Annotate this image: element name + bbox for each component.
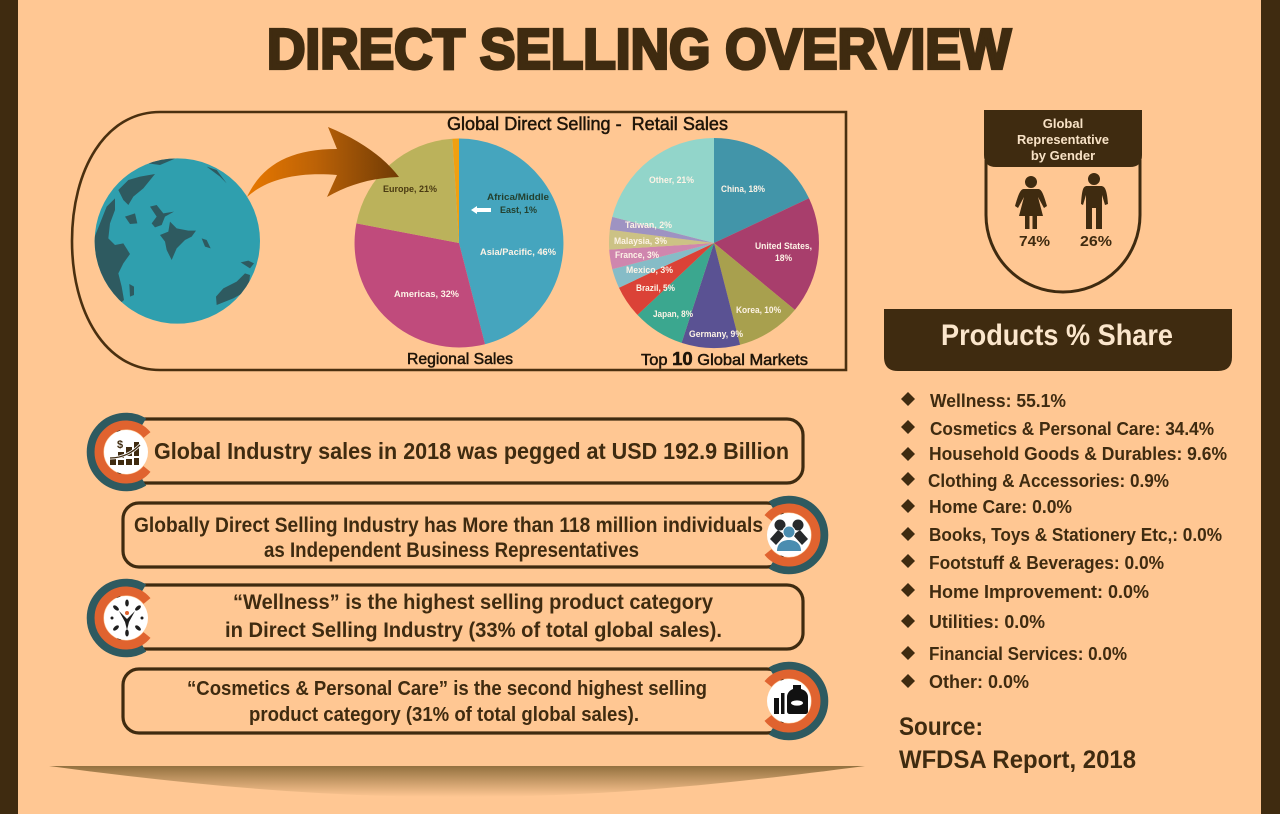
pie chart: top 10 global markets: Malaysia, 3% (614, 236, 667, 247)
source note: WFDSA Report, 2018 (899, 746, 1136, 774)
product share list: Cosmetics & Personal Care: 34.4% (930, 418, 1214, 439)
pie chart: top 10 global markets: Germany, 9% (689, 329, 743, 340)
product share list: Home Improvement: 0.0% (929, 581, 1149, 602)
panel frame (72, 112, 846, 370)
arrow: small white pointer (471, 206, 491, 214)
caption: top 10 global markets: Top 10 Global Markets (641, 349, 808, 369)
shield header (984, 110, 1142, 167)
pie chart: top 10 global markets: China, 18% (721, 184, 765, 195)
stat: women: 74% (1019, 233, 1050, 250)
product share list: Home Care: 0.0% (929, 496, 1072, 517)
panel: global direct selling retail sales (72, 112, 846, 370)
callout text: Global Industry sales in 2018 was pegged at USD 192.9 Billion (154, 438, 789, 464)
pie chart: top 10 global markets: Other, 21% (649, 175, 695, 186)
pie chart: regional sales: Africa/Middle (487, 192, 549, 203)
source note: Source: (899, 713, 983, 741)
callout: independent business representatives: as Independent Business Representatives (264, 539, 639, 562)
pie chart: top 10 global markets: France, 3% (615, 250, 659, 261)
icon: man (1081, 173, 1108, 229)
shield heading (1017, 116, 1109, 163)
callout text: “Wellness” is the highest selling product category (233, 591, 713, 614)
callout: wellness: in Direct Selling Industry (33% of total global sales). (225, 619, 722, 642)
title: DIRECT SELLING OVERVIEW (267, 18, 1011, 82)
callout: wellness (91, 583, 803, 653)
icon: business people (767, 500, 824, 570)
right side bar (1261, 0, 1280, 814)
pie chart: regional sales: Europe, 21% (383, 184, 438, 195)
pie chart: top 10 global markets (609, 138, 819, 348)
shield heading: Global (1043, 116, 1083, 131)
product share list: Footstuff & Beverages: 0.0% (929, 552, 1164, 573)
product share list: Utilities: 0.0% (929, 611, 1045, 632)
shield heading: by Gender (1031, 148, 1095, 163)
pie chart: top 10 global markets: 18% (775, 253, 792, 264)
icon: sales growth: $ (117, 439, 123, 451)
callout: independent business representatives (123, 500, 824, 570)
pie chart: top 10 global markets: Taiwan, 2% (625, 220, 673, 231)
pie chart: regional sales: Asia/Pacific, 46% (480, 247, 557, 258)
pie chart: top 10 global markets: Brazil, 5% (636, 283, 675, 294)
icon: woman (1015, 176, 1047, 229)
caption: regional sales: Regional Sales (407, 351, 513, 368)
shield outline (986, 160, 1140, 292)
callout: cosmetics and personal care (123, 666, 824, 736)
panel: products share heading (884, 309, 1232, 371)
icon: cosmetics (767, 666, 824, 736)
panel: global representative by gender (984, 110, 1142, 292)
icon: globe (93, 158, 260, 324)
stat: men: 26% (1080, 233, 1112, 250)
product share list (901, 390, 1227, 692)
ground shadow (49, 766, 865, 797)
product share list: Wellness: 55.1% (930, 390, 1066, 411)
panel: products share heading: Products % Share (941, 319, 1173, 352)
left side bar (0, 0, 18, 814)
pie chart: top 10 global markets: Mexico, 3% (626, 265, 674, 276)
callout text: Globally Direct Selling Industry has More than 118 million individuals (134, 514, 763, 537)
product share list: Other: 0.0% (929, 671, 1029, 692)
pie chart: top 10 global markets: Korea, 10% (736, 305, 781, 316)
product share list: Financial Services: 0.0% (929, 643, 1127, 664)
shield heading: Representative (1017, 132, 1109, 147)
icon: wellness (91, 583, 148, 653)
product share list: Household Goods & Durables: 9.6% (929, 443, 1227, 464)
callout text: “Cosmetics & Personal Care” is the second highest selling (187, 678, 707, 700)
product share list: Clothing & Accessories: 0.9% (928, 470, 1169, 491)
pie chart: top 10 global markets: Japan, 8% (653, 309, 693, 320)
source note (899, 713, 1136, 774)
pie chart: regional sales: Americas, 32% (394, 289, 460, 300)
callout: cosmetics and personal care: product category (31% of total global sales). (249, 704, 639, 726)
pie chart: regional sales (355, 138, 563, 347)
icon: sales growth (91, 417, 148, 487)
pie chart: regional sales: East, 1% (500, 205, 538, 216)
pie chart: top 10 global markets: United States, (755, 241, 812, 252)
arrow: globe to pie charts (247, 127, 399, 197)
callout: global industry sales (91, 417, 803, 487)
chart heading: Global Direct Selling - Retail Sales (447, 114, 728, 134)
product share list: Books, Toys & Stationery Etc,: 0.0% (929, 524, 1222, 545)
